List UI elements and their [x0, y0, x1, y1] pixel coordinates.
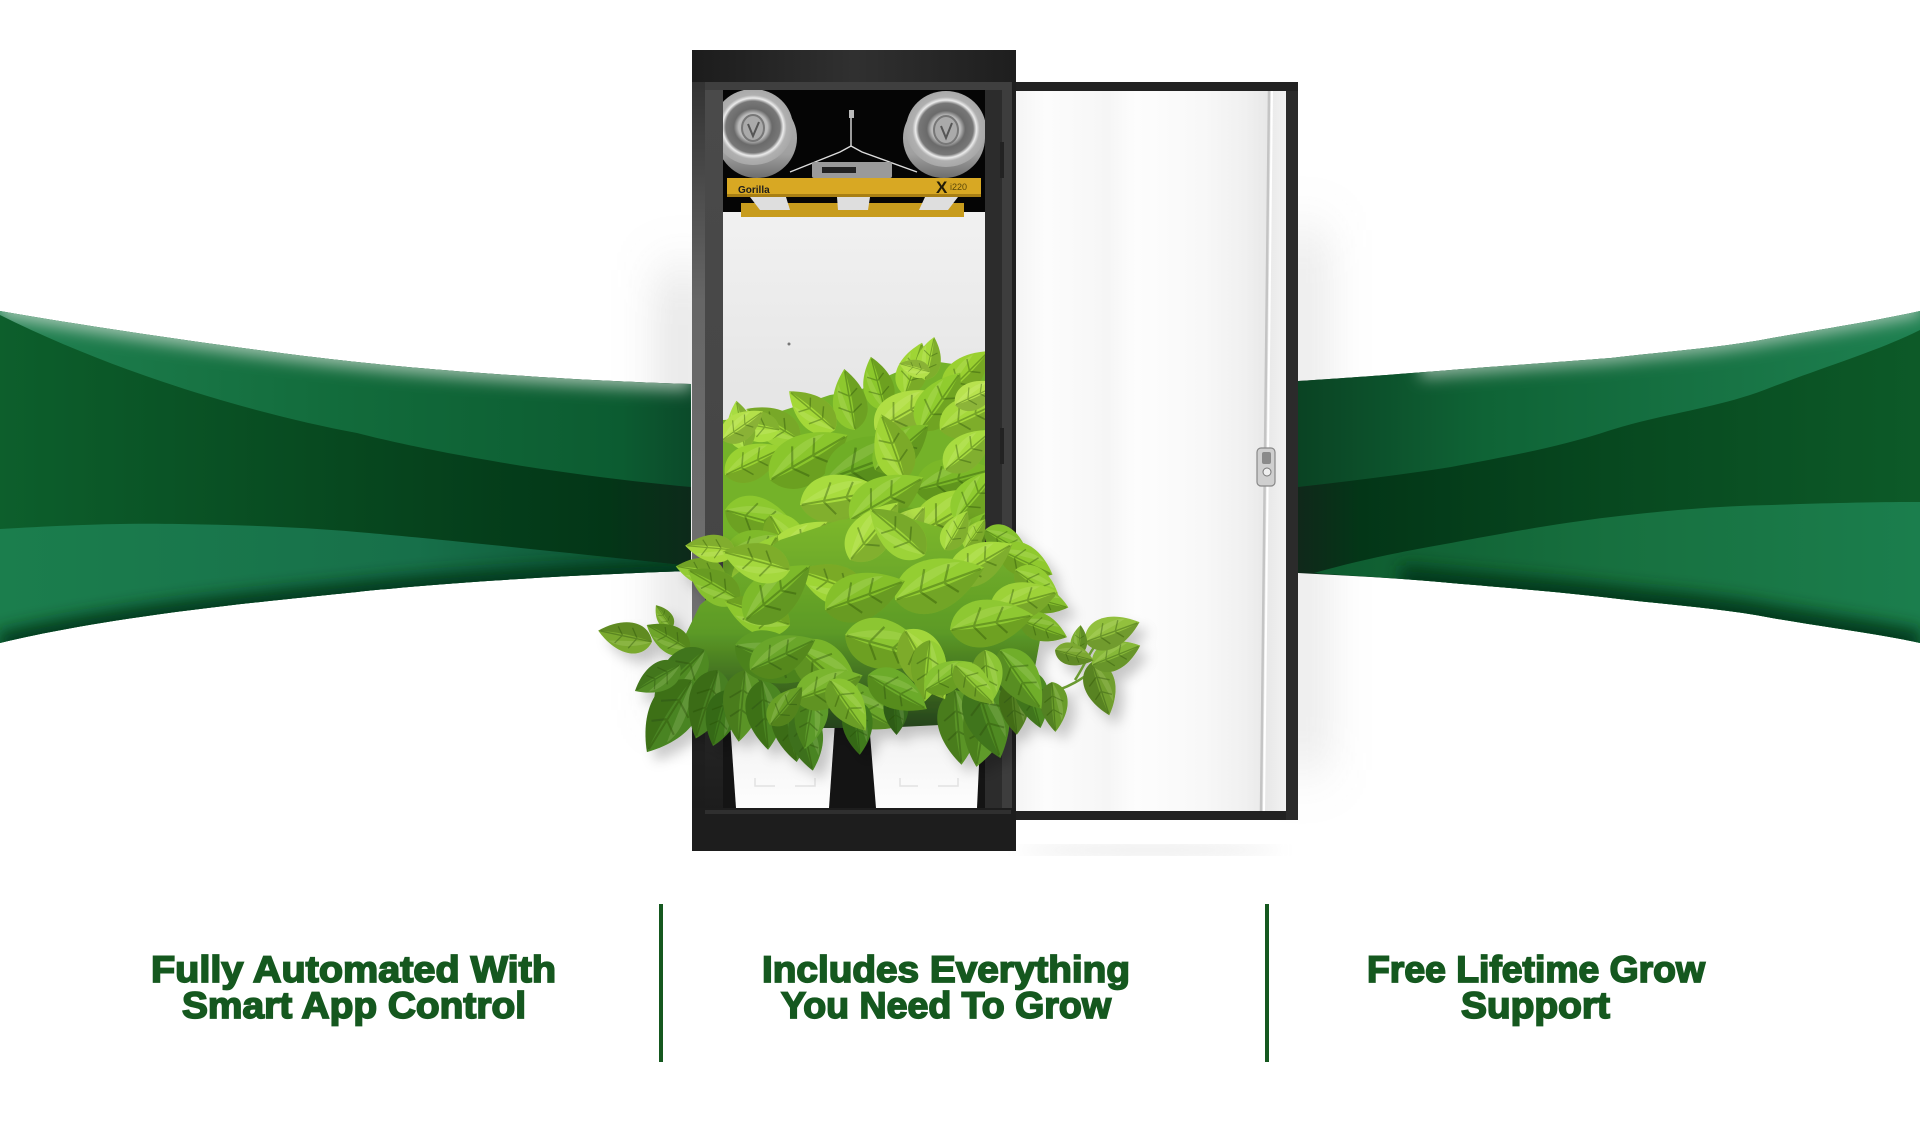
divider one [659, 904, 663, 1062]
middle caption [762, 949, 1130, 1026]
left caption: Smart App Control [182, 985, 526, 1026]
left caption [151, 949, 556, 1026]
plant stems [1040, 640, 1110, 695]
light brand: Gorilla [738, 185, 770, 196]
cabinet floor [723, 700, 985, 812]
lower basil plant [595, 489, 1145, 774]
divider two [1265, 904, 1269, 1062]
light model: i220 [950, 182, 967, 192]
soft cabinet shadows [672, 230, 1312, 853]
LED strips [750, 197, 958, 210]
left ribbon lower band [0, 524, 680, 643]
plant silhouette [678, 515, 1040, 728]
cabinet frame [692, 50, 1016, 851]
left green ribbon [0, 300, 691, 650]
cabinet top header [692, 50, 1016, 82]
light bar rear [741, 203, 964, 217]
right caption: Support [1461, 985, 1610, 1026]
door rod [1261, 91, 1269, 811]
middle caption: Includes Everything [762, 949, 1130, 990]
light model: X [936, 178, 948, 197]
hinges [1000, 142, 1004, 464]
pot right [869, 722, 981, 808]
plant pots [730, 722, 981, 808]
fan left [723, 90, 797, 178]
left caption: Fully Automated With [151, 949, 556, 990]
left ribbon upper band [0, 311, 691, 487]
right ribbon lower band [1314, 502, 1920, 643]
mid canopy leaves [717, 489, 1072, 740]
black light chamber [723, 90, 985, 212]
light bar front [727, 178, 981, 197]
light model [936, 178, 967, 197]
fan right [903, 91, 986, 178]
pot left [730, 722, 835, 808]
right caption [1367, 949, 1705, 1026]
upper basil plant [723, 337, 985, 578]
grow light [727, 110, 981, 217]
cabinet back wall [723, 212, 985, 812]
right green ribbon [1298, 300, 1920, 650]
middle caption: You Need To Grow [781, 985, 1111, 1026]
right caption: Free Lifetime Grow [1367, 949, 1705, 990]
upper leaves [723, 337, 985, 578]
light hanger [790, 110, 917, 178]
drooping outer leaves [595, 532, 1145, 774]
right ribbon upper band [1298, 311, 1920, 487]
carbon filter fans [713, 89, 986, 178]
door latch [1257, 448, 1275, 486]
door inner liner [1013, 91, 1286, 811]
open door [1011, 82, 1298, 820]
cabinet body [692, 50, 1016, 851]
